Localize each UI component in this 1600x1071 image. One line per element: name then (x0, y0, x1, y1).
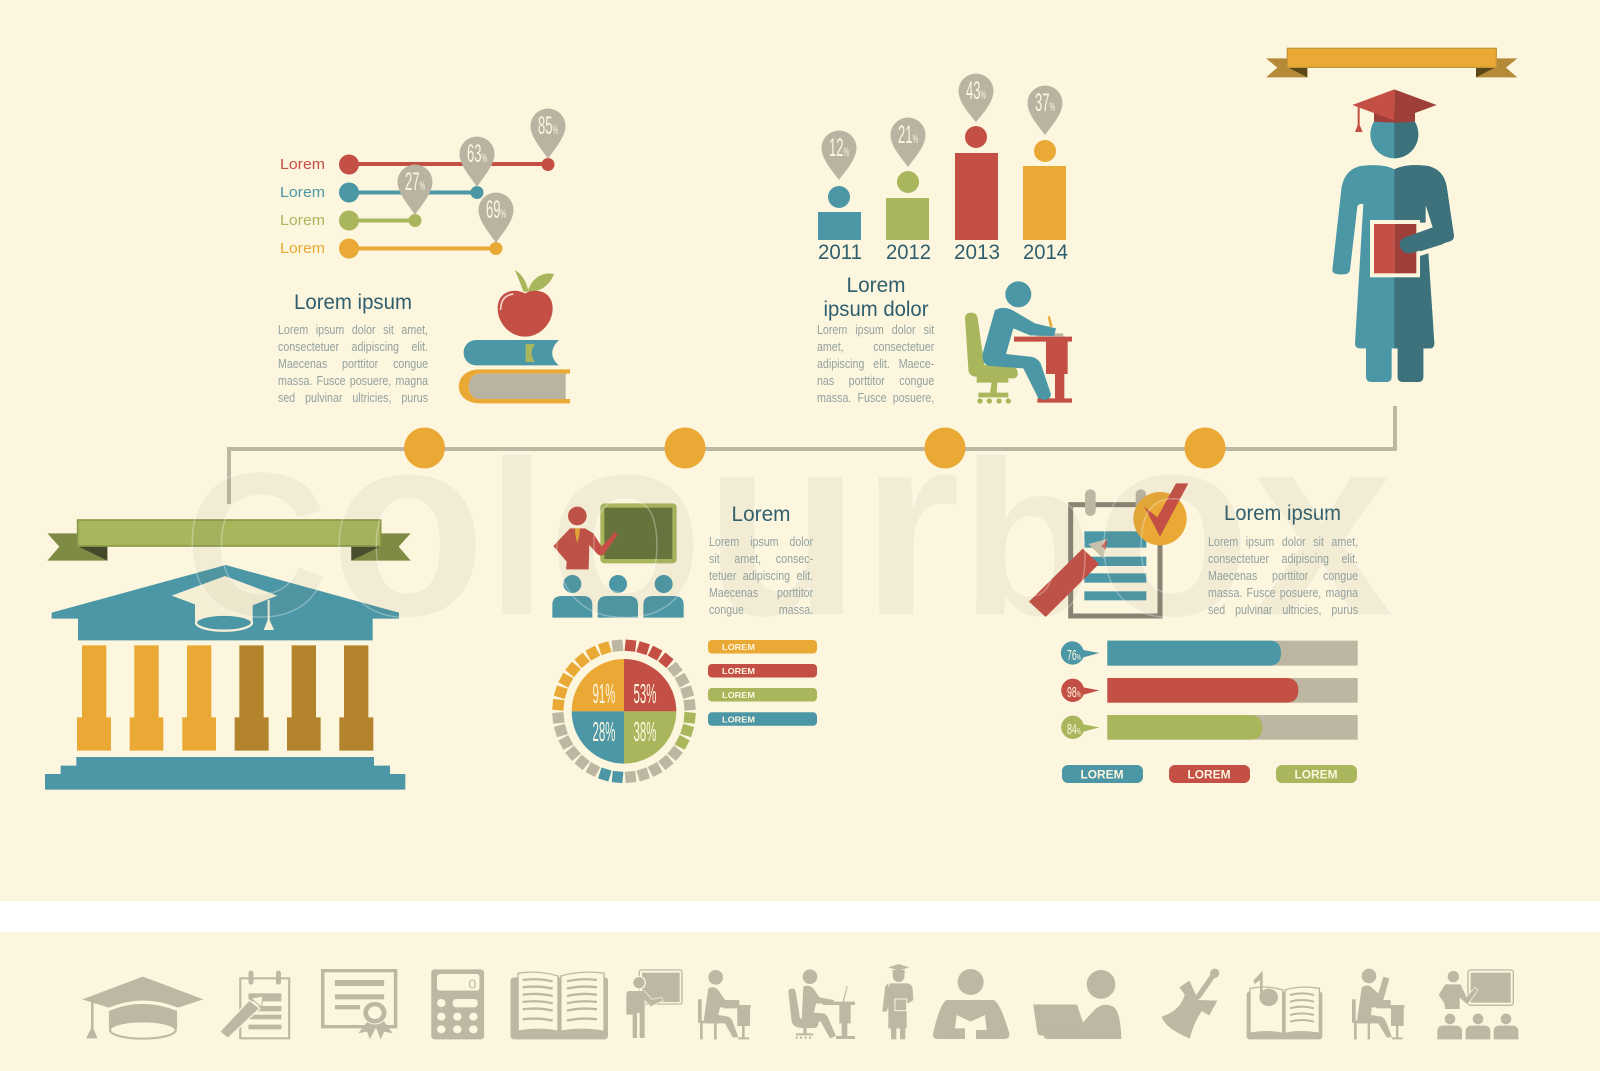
chart: progress bars (1061, 641, 1358, 740)
pin 69 (478, 192, 514, 243)
text block: left top: massa. Fusce posuere, magna (278, 373, 428, 388)
text block: bar chart: amet, consectetuer (817, 339, 934, 354)
text block: right (1208, 534, 1358, 617)
pin 43: 43% (966, 77, 986, 105)
panel: bar chart (818, 74, 1068, 264)
icon: office worker with laptop (788, 969, 855, 1039)
chart: donut: 28% (592, 716, 616, 747)
icon: clipboard and pencil (220, 971, 289, 1038)
heading: lorem ipsum dolor (824, 274, 928, 321)
icon: reader (933, 969, 1009, 1039)
icon: mortarboard (82, 977, 204, 1039)
icon: bell (1162, 969, 1219, 1039)
text block: right: massa. Fusce posuere, magna (1208, 585, 1358, 600)
legend pills right (1062, 765, 1357, 783)
roof (52, 565, 399, 640)
head and gown (1332, 110, 1454, 382)
banner: green (47, 520, 411, 561)
book (1370, 220, 1420, 277)
text block: right: sed pulvinar ultricies, purus (1208, 602, 1358, 617)
icon: calculator: 0 (468, 976, 477, 992)
text block: center: sit amet, consec- (709, 551, 813, 566)
chart: progress bars: 98% (1067, 684, 1081, 701)
text block: right: Lorem ipsum dolor sit amet, (1208, 534, 1358, 549)
text block: bar chart (817, 322, 934, 405)
icon: open book (511, 972, 608, 1039)
chart: progress bars: 76% (1067, 647, 1081, 664)
heading: lorem ipsum dolor: Lorem (846, 274, 906, 297)
heading: lorem center: Lorem (732, 503, 790, 526)
year labels: 2014 (1023, 241, 1068, 264)
legend pills (708, 640, 817, 726)
icon: person with laptop (1033, 970, 1121, 1039)
text block: left top: consectetuer adipiscing elit. (278, 339, 428, 354)
figure: graduate with banner (1266, 48, 1517, 382)
heading: lorem ipsum left: Lorem ipsum (294, 291, 412, 314)
row labels: Lorem (280, 184, 325, 201)
text block: left top: Lorem ipsum dolor sit amet, (278, 322, 428, 337)
chart: donut (552, 639, 696, 783)
graduation cap (172, 576, 277, 631)
legend pills right: LOREM (1188, 768, 1230, 782)
legend pills: LOREM (722, 642, 755, 652)
text block: center: Lorem ipsum dolor (709, 534, 813, 549)
chart: progress bars: 84% (1067, 721, 1081, 738)
row labels: Lorem (280, 240, 325, 257)
icon: student at desk (698, 970, 751, 1039)
year labels: 2013 (954, 241, 1000, 264)
year labels: 2012 (886, 241, 931, 264)
icon row: grey education icons (82, 964, 1518, 1039)
text block: right: consectetuer adipiscing elit. (1208, 551, 1358, 566)
pin 27: 27% (405, 168, 425, 196)
text block: bar chart: Lorem ipsum dolor sit (817, 322, 934, 337)
text block: bar chart: massa. Fusce posuere, (817, 390, 934, 405)
watermark: Colourbox (184, 378, 1396, 671)
row labels: Lorem (280, 212, 325, 229)
year labels (818, 241, 1068, 264)
pin 12 (822, 130, 856, 180)
mortarboard (1374, 112, 1415, 122)
row labels (280, 156, 325, 257)
timeline (229, 406, 1395, 504)
pin 12: 12% (829, 134, 849, 162)
icon: teacher at board (626, 970, 682, 1038)
pin 85: 85% (538, 112, 558, 140)
pin 85 (530, 108, 566, 159)
text block: center: tetuer adipiscing elit. (709, 568, 813, 583)
icon: graduate small (882, 964, 913, 1039)
legend pills right: LOREM (1294, 768, 1338, 782)
white band (0, 901, 1600, 932)
legend pills right: LOREM (1080, 768, 1124, 782)
arm (1420, 241, 1454, 256)
text block: bar chart: nas porttitor congue (817, 373, 934, 388)
pin 69: 69% (486, 196, 506, 224)
text block: center (709, 534, 813, 617)
text block: left top: Maecenas porttitor congue (278, 356, 428, 371)
icon: music book (1247, 971, 1322, 1039)
pin 63: 63% (467, 140, 487, 168)
heading: lorem ipsum right: Lorem ipsum (1224, 502, 1341, 525)
bars (818, 212, 861, 240)
steps (45, 757, 405, 790)
lines (349, 164, 548, 248)
text block: bar chart: adipiscing elit. Maece- (817, 356, 934, 371)
chart: donut: 38% (634, 716, 656, 747)
chart: donut: 91% (592, 678, 616, 709)
pin 21: 21% (898, 121, 918, 149)
pin 63 (460, 136, 494, 187)
row labels: Lorem (280, 156, 325, 173)
icon: diploma (323, 971, 396, 1039)
columns (77, 645, 216, 751)
icon: student writing at desk (965, 281, 1072, 404)
pin 27 (398, 164, 432, 215)
icon: teacher and students (552, 503, 684, 618)
pin 43 (958, 74, 994, 122)
panel: line chart (280, 108, 566, 258)
icon: apple on books (459, 270, 570, 403)
heading: lorem ipsum dolor: ipsum dolor (824, 298, 928, 321)
legend pills: LOREM (722, 690, 755, 700)
icon: clipboard with check (1029, 483, 1188, 617)
text block: left top: sed pulvinar ultricies, purus (278, 390, 428, 405)
text block: center: Maecenas porttitor (709, 585, 813, 600)
text block: left top (278, 322, 428, 405)
icon: calculator (431, 969, 484, 1039)
legend pills: LOREM (722, 714, 755, 724)
banner: orange (1266, 48, 1517, 77)
icon: university building with banner (45, 520, 411, 790)
legend pills: LOREM (722, 666, 755, 676)
icon: student raising hand (1352, 969, 1404, 1039)
text block: center: congue massa. (709, 602, 813, 617)
icon: class teacher (1437, 970, 1518, 1039)
text block: right: Maecenas porttitor congue (1208, 568, 1358, 583)
pin 21 (890, 118, 926, 167)
pin 37: 37% (1035, 89, 1055, 117)
tassel (1355, 107, 1363, 132)
chart: donut: 53% (634, 678, 656, 709)
pin 37 (1028, 86, 1062, 135)
year labels: 2011 (818, 241, 862, 264)
